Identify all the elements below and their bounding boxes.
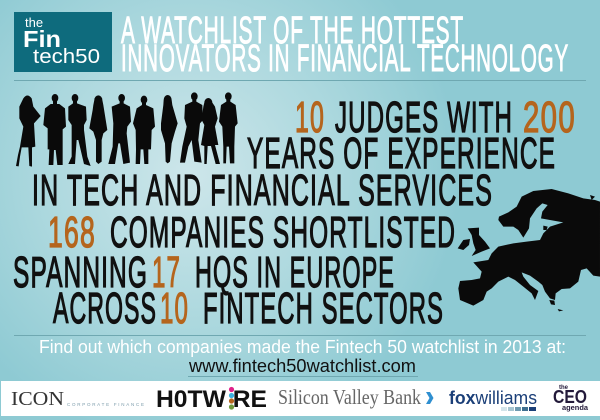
logo: ICON Corporate Finance: ICON [11,388,64,410]
logo: Silicon Valley Bank: Silicon Valley Bank [278,385,421,409]
logo: Hotwire: H0TWIRE [156,386,267,413]
figures 6 to 10 [133,92,238,164]
logo: the Fintech50: the [25,15,43,30]
stat text: headquarters: HQS IN EUROPE [195,248,395,297]
logo: The CEO Agenda: agenda [562,405,588,412]
silhouettes of ten judges [16,92,238,167]
stat text: sectors: ACROSS [53,284,157,333]
logo: the Fintech50: tech50 [33,46,100,68]
stat text: judges and experience: 10 [295,93,325,142]
figure 4 [89,95,107,164]
figure 2 [43,94,66,165]
logo: the Fintech50 [14,12,112,72]
call to action [39,337,566,376]
figure 10 [219,92,238,163]
logo: The CEO Agenda: the [559,385,569,391]
stat text: sectors: 10 [160,284,189,333]
call to action: www.fintech50watchlist.com [188,356,416,376]
sponsor strip [1,381,600,416]
stat text: companies shortlisted: 168 [48,208,96,257]
stat text: headquarters: 17 [152,248,181,297]
logo: The CEO Agenda: CEO [553,387,587,407]
map of Europe [458,189,600,311]
title [121,10,569,80]
figure 5 [108,94,131,164]
stat text: companies shortlisted [48,208,456,257]
figure 6 [133,96,155,164]
logo: ICON Corporate Finance: CORPORATE FINANCE [67,402,144,407]
figures 1 to 5 [16,94,131,167]
figure 1 [16,95,41,167]
figure 3 [68,94,91,166]
figure 7 [161,95,178,163]
figure 9 [201,98,220,164]
logo: The CEO Agenda [553,385,588,412]
stat text: judges and experience [32,93,576,215]
stat text: headquarters [13,248,395,297]
call to action: Find out which companies made the Fintech 50 watchlist in 2013 at: [39,337,566,357]
logo: Fox Williams: foxwilliams [449,388,537,408]
stat text: sectors [53,284,444,333]
figure 8 [180,92,203,163]
logo: the Fintech50: Fin [23,26,61,52]
logo: ICON Corporate Finance [11,388,144,410]
stat text: headquarters: SPANNING [13,248,148,297]
